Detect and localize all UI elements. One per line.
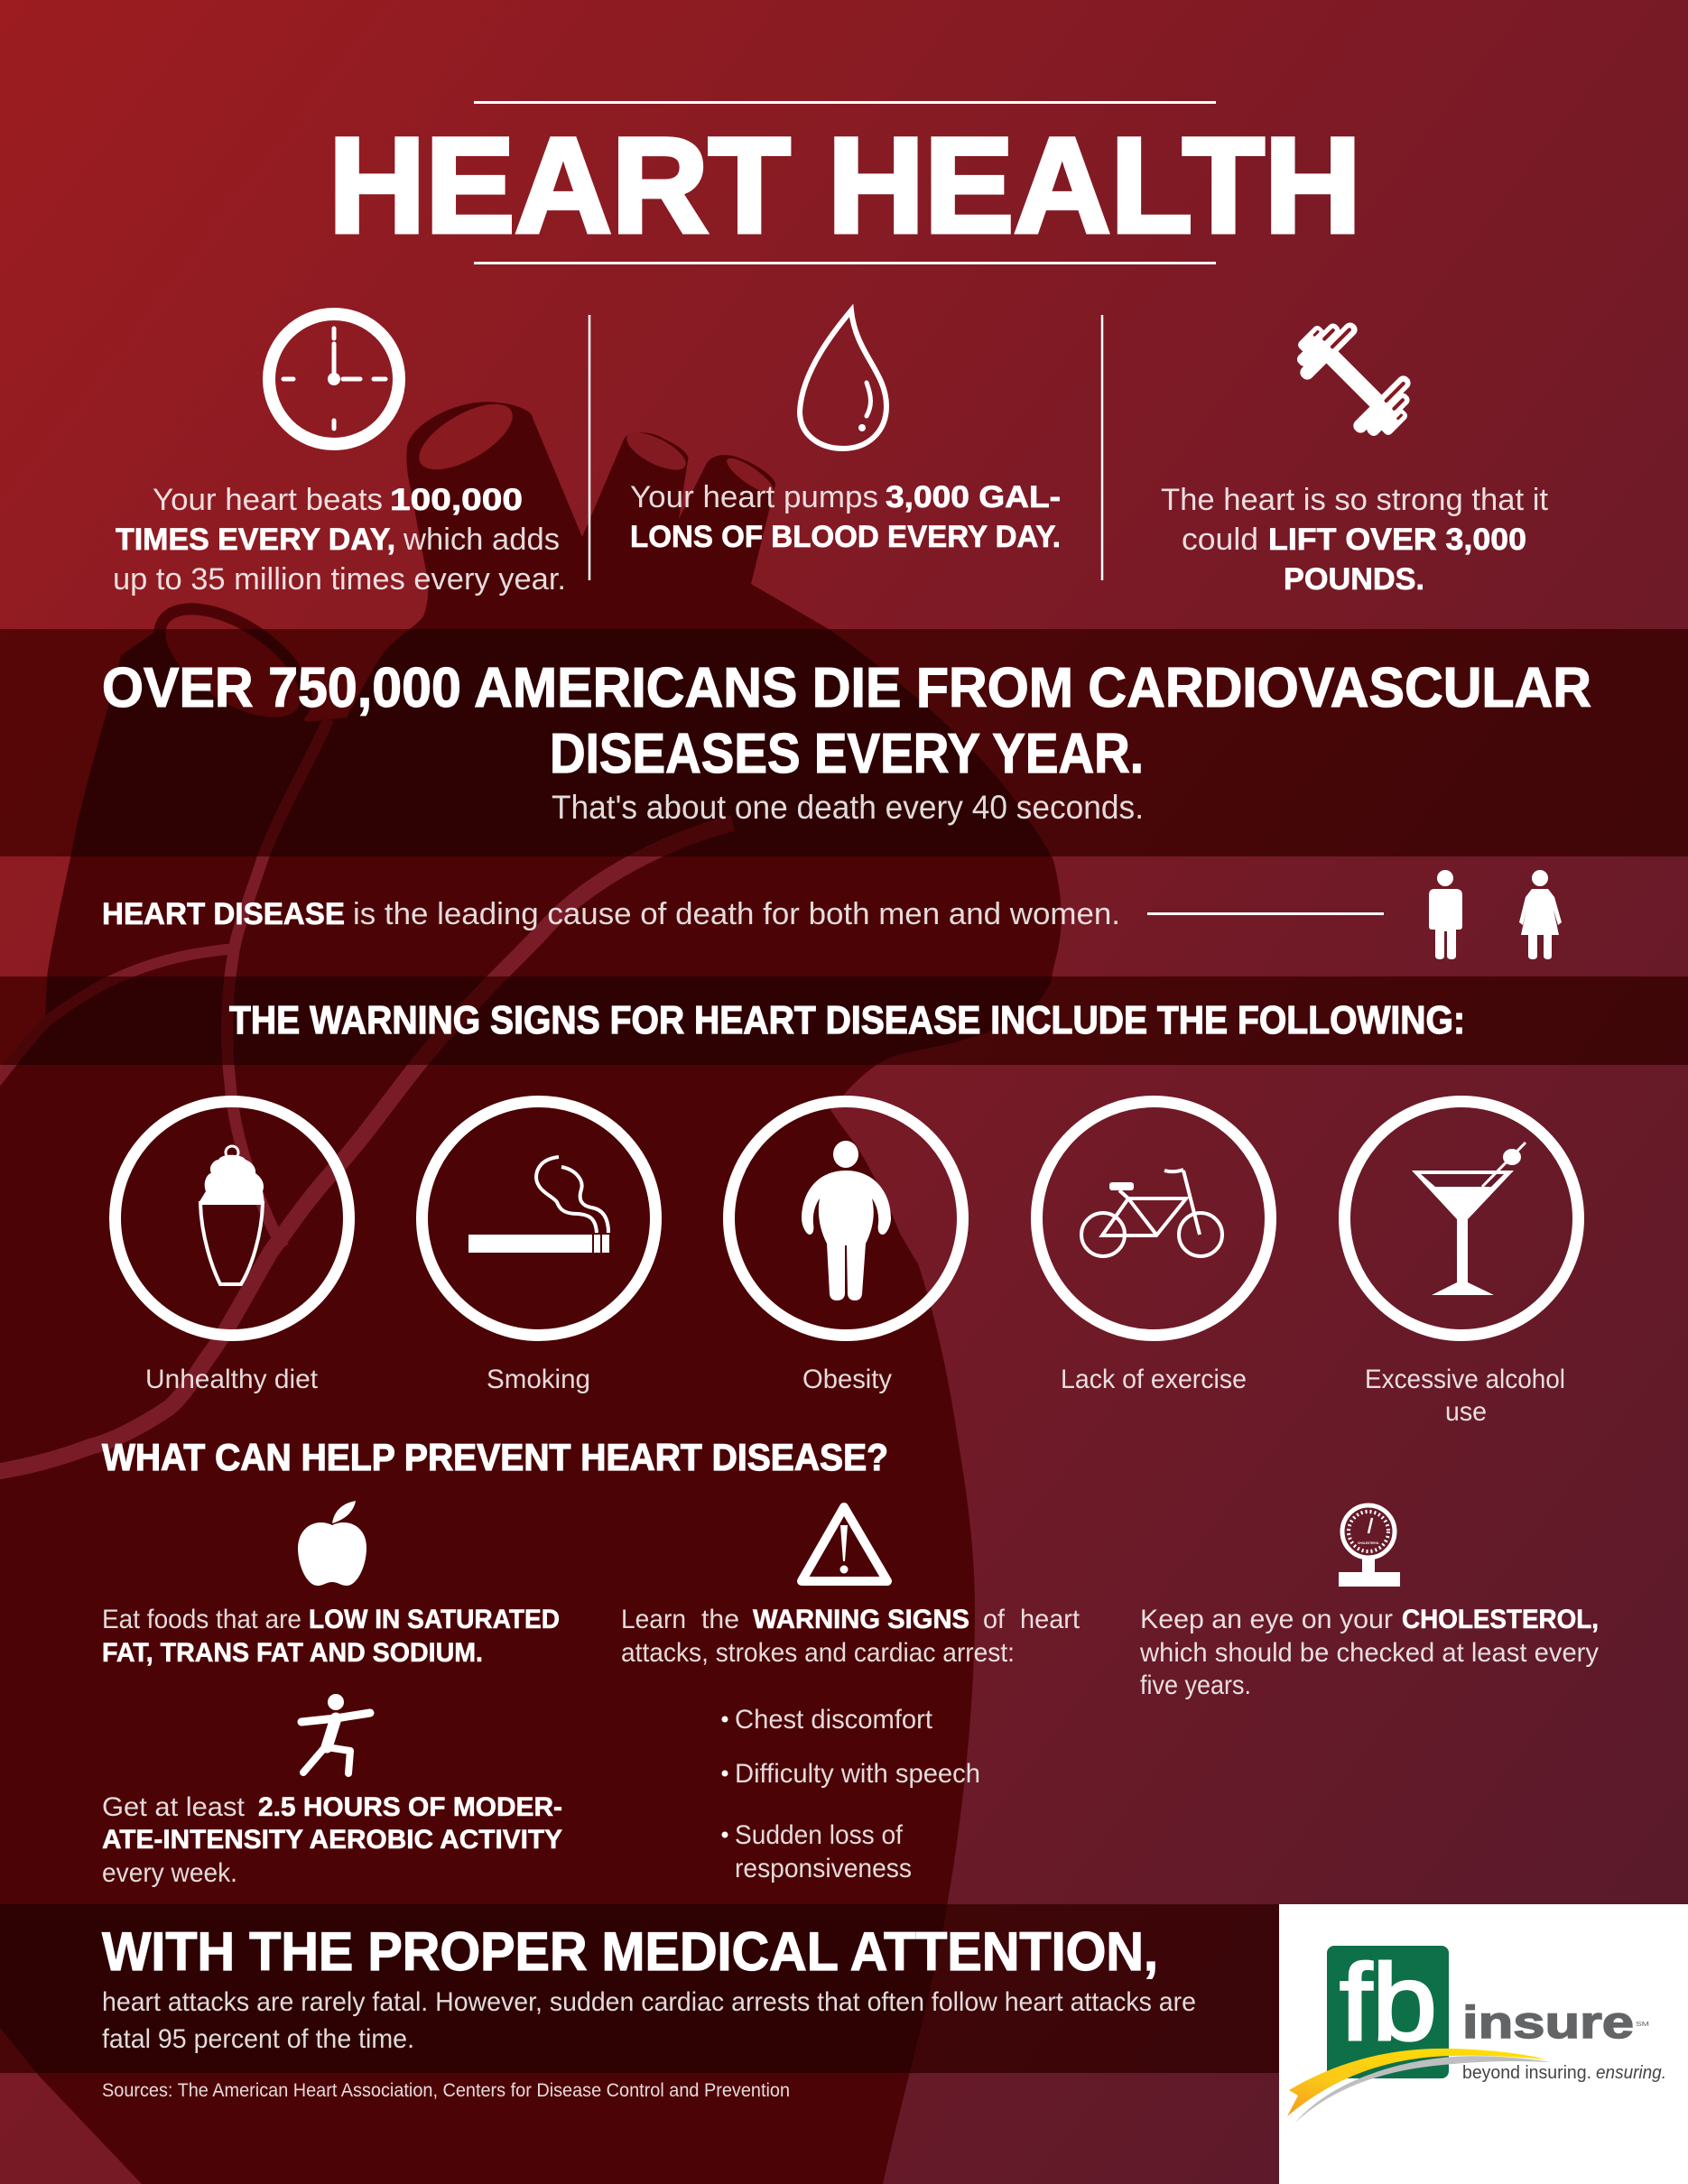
text: heart strength: POUNDS. [1284,562,1424,597]
text: warning signs intro: attacks, strokes and cardiac arrest: [621,1638,1015,1668]
text: cholesterol: CHOLESTEROL, [1402,1605,1599,1634]
logo: fb letters: fb [1340,1942,1437,2063]
text: warning signs intro: heart [1020,1605,1081,1634]
icon: martini glass [1412,1143,1526,1295]
icon: exercising figure [301,1694,370,1773]
logo: insure wordmark: SM [1636,2022,1649,2028]
text: heart beats: TIMES EVERY DAY, [116,523,395,557]
icon: milkshake [199,1146,264,1284]
heart: aorta opening [409,391,523,483]
warning sign: unhealthy diet [116,1101,348,1394]
text: heart strength: LIFT OVER 3,000 [1268,523,1526,557]
text: warning signs intro: WARNING SIGNS [753,1605,969,1634]
bullet list: warning signs: Sudden loss of [735,1820,904,1850]
text: aerobic activity [102,1792,562,1888]
logo: insure wordmark: insure [1462,1997,1634,2048]
warning sign: lack of exercise [1036,1101,1271,1394]
text: leading cause of death: HEART DISEASE [102,897,345,931]
bullet list: warning signs: Difficulty with speech [735,1759,980,1789]
warning sign: obesity [729,1101,962,1394]
bullet list: warning signs: Chest discomfort [735,1705,933,1735]
warning signs heading: THE WARNING SIGNS FOR HEART DISEASE INCLUDE THE FOLLOWING: [229,998,1465,1042]
bullet list: warning signs [722,1705,980,1883]
statistic heading [102,657,1591,826]
icon: cigarette [468,1157,609,1253]
heart: third vessel opening [722,453,778,498]
text: cholesterol: which should be checked at least every [1139,1638,1599,1668]
warning sign: excessive alcohol use: Excessive alcohol [1365,1365,1565,1394]
text: saturated fat: Eat foods that are [102,1605,301,1634]
text: warning signs intro [621,1605,1081,1668]
text: cholesterol: five years. [1140,1670,1251,1700]
coronary artery stripes [0,719,733,1472]
logo panel [1279,1904,1688,2184]
dark band: statistics [0,629,1688,856]
text: warning signs intro: the [701,1605,739,1634]
heart: left vessel ring [141,586,325,746]
icon: clock [269,314,399,444]
text: heart beats: 100,000 [390,483,523,517]
icon: bicycle [1081,1170,1222,1256]
connector line [1147,912,1384,915]
closing text [102,1987,1196,2054]
heart silhouette [0,391,1062,2184]
statistic heading: DISEASES EVERY YEAR. [550,723,1144,785]
divider lines [589,315,1102,580]
text: heart pumps [630,480,1061,554]
warning sign: smoking: Smoking [487,1365,590,1394]
warning sign: excessive alcohol use: use [1445,1397,1487,1427]
logo: tagline: beyond insuring. [1462,2063,1591,2083]
title: HEART HEALTH [329,109,1361,261]
text: heart beats: up to 35 million times every year. [113,562,566,597]
warning sign: unhealthy diet: Unhealthy diet [145,1365,319,1394]
text: saturated fat: LOW IN SATURATED [309,1605,560,1634]
warning sign: obesity: Obesity [802,1365,892,1394]
closing text: heart attacks are rarely fatal. However, sudden cardiac arrests that often follow heart attacks are [102,1987,1196,2017]
text: heart beats [113,483,566,597]
dark band: warning signs [0,976,1688,1065]
logo: swoosh [1287,2049,1551,2123]
icon: cholesterol gauge: CHOLESTEROL [1358,1541,1379,1545]
text: cholesterol: Keep an eye on your [1140,1605,1393,1634]
closing text: fatal 95 percent of the time. [102,2024,414,2054]
logo: green square [1327,1946,1449,2078]
icon: obese person [802,1141,891,1300]
text: heart pumps: Your heart pumps [630,480,878,514]
text: aerobic activity: every week. [102,1858,237,1888]
text: heart beats: which adds [403,523,560,557]
text: warning signs intro: Learn [621,1605,686,1634]
text: aerobic activity: ATE-INTENSITY AEROBIC ACTIVITY [102,1825,562,1855]
logo: tagline [1462,2063,1666,2083]
text: aerobic activity: 2.5 HOURS OF MODER- [258,1792,562,1822]
text: aerobic activity: Get at least [102,1792,246,1822]
icon: woman [1519,870,1562,959]
heart: second vessel opening [622,425,691,477]
text: warning signs intro: of [983,1605,1006,1634]
text: leading cause of death: is the leading cause of death for both men and women. [353,897,1120,931]
text: cholesterol [1139,1605,1599,1700]
sources: Sources: The American Heart Association, Centers for Disease Control and Prevention [102,2080,790,2101]
text: saturated fat [102,1605,560,1668]
text: heart strength: The heart is so strong that it [1161,483,1549,517]
logo: tagline: ensuring. [1596,2063,1666,2083]
text: heart strength [1161,483,1549,597]
icon: blood drop [800,310,886,449]
prevention heading: WHAT CAN HELP PREVENT HEART DISEASE? [102,1436,888,1478]
text: saturated fat: FAT, TRANS FAT AND SODIUM. [102,1638,483,1668]
warning sign: smoking [422,1101,655,1394]
icon: dumbbell [1283,305,1428,450]
text: heart strength: could [1182,523,1258,557]
icon: apple [298,1501,366,1586]
bullet list: warning signs: responsiveness [735,1854,912,1883]
text: heart pumps: LONS OF BLOOD EVERY DAY. [630,520,1061,554]
text: heart beats: Your heart beats [153,483,383,517]
dark band: medical attention [0,1904,1279,2073]
statistic heading: That's about one death every 40 seconds. [552,789,1144,826]
icon: cholesterol gauge [1339,1505,1400,1587]
statistic heading: OVER 750,000 AMERICANS DIE FROM CARDIOVASCULAR [102,657,1591,719]
icon: warning triangle [802,1507,887,1581]
icon: man [1429,870,1462,959]
text: heart pumps: 3,000 GAL- [886,480,1061,514]
closing heading: WITH THE PROPER MEDICAL ATTENTION, [102,1921,1158,1982]
warning sign: excessive alcohol use [1345,1101,1578,1427]
warning sign: lack of exercise: Lack of exercise [1061,1365,1247,1394]
